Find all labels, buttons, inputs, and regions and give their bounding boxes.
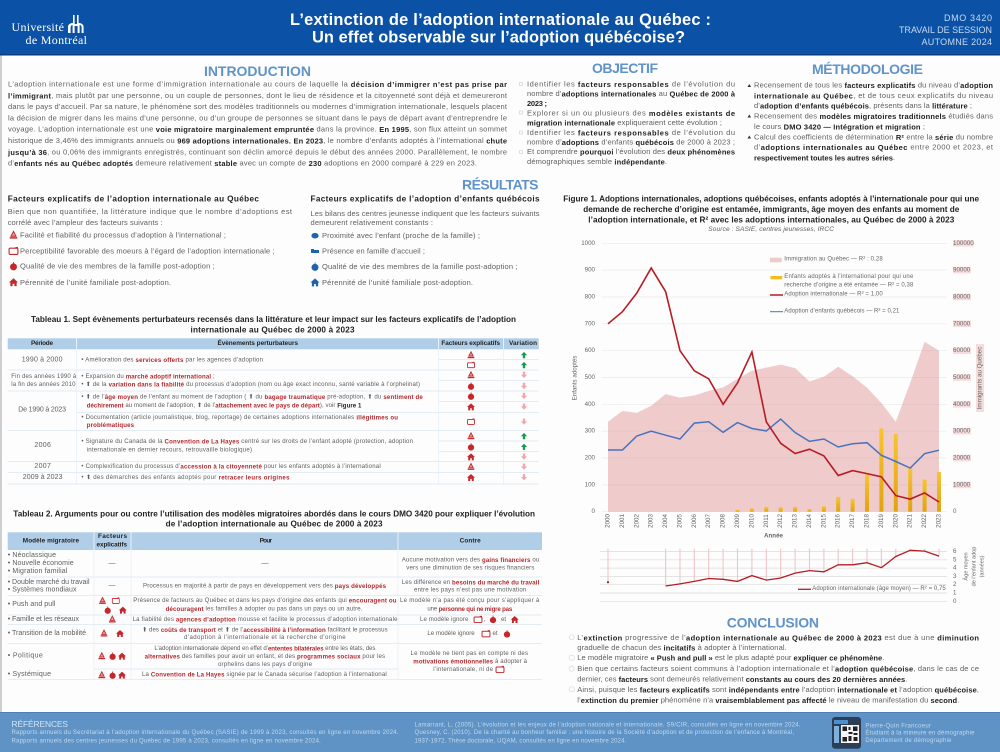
panel: facteurs adoption québécoise: [310, 194, 540, 287]
subheading: facteurs internationaux: Facteurs explicatifs de l’adoption internationale au Québec: [8, 194, 259, 204]
logo: Université de Montréal: Université: [12, 20, 64, 34]
méthodologie bullet list: le cours DMO 3420 — Intégration et migration ;: [754, 122, 925, 131]
x axis years: 2023: [936, 514, 942, 528]
left axis labels: 700: [585, 320, 596, 327]
panel: tableau 1: [8, 315, 539, 484]
panel: méthodologie: [748, 61, 994, 162]
objectif bullet list: Explorer si un ou plusieurs des modèles existants de: [527, 108, 735, 117]
objectif bullet list: nombre d’adoptions internationales au Québec de 2000 à: [527, 89, 736, 98]
age legend: Adoption internationale (âge moyen) — R² = 0,75: [812, 586, 946, 592]
factor list with red icons: Perceptibilité favorable des moeurs à l’égard de l’adoption internationale ;: [20, 246, 275, 256]
line: adoption d'enfants québécois: [608, 419, 939, 468]
tableau 1 période column: 2009 à 2023: [23, 474, 63, 481]
x axis years: 2007: [705, 514, 712, 528]
right axis labels: 70000: [953, 320, 971, 327]
age chart: [600, 547, 985, 605]
conclusion text: dernier, ces facteurs sont demeurés relativement constants au cours des 20 dernières années.: [577, 674, 907, 684]
tableau 2 pour column: [133, 560, 398, 678]
figure 1 title: demande de recherche d’origine est entamée, immigrants, âge moyen des enfants au moment de: [583, 205, 960, 214]
méthodologie bullet list: d’adoptions internationales au Québec entre 2000 et 2023, et: [754, 143, 994, 152]
introduction text: voyage. L’adoption internationale est une voie migratoire marginalement empruntée dans la province. En 1995, son flux atteint un sommet: [8, 125, 508, 134]
tableau 2 pour column: alternatives des familles pour avoir un enfant, et des programmes sociaux pour les: [145, 653, 385, 660]
factor list with blue icons: Pérennité de l’unité familiale post-adoption.: [322, 278, 473, 287]
references right: Quesney, C. (2010). De la charité au bonheur familial : une histoire de la Société d’adoption et de protection de l’enfance à Montréal,: [414, 730, 794, 736]
tableau 2 modèle column: • Push and pull: [8, 601, 56, 608]
introduction text: la décision de migrer dans les mains d’une personne, ou d’un groupe de personnes se situant dans le pays de départ avant d’entreprendre le: [8, 113, 507, 122]
x axis years: 2018: [864, 514, 870, 528]
tableau 2 modèle column: • Nouvelle économie: [8, 560, 74, 567]
objectif bullet list: Et comprendre pourquoi l’évolution des deux phénomènes: [527, 147, 735, 156]
conclusion text: Ainsi, puisque les facteurs explicatifs sont indépendants entre l’adoption internationale et l’adoption québécoise,: [577, 685, 979, 694]
tableau 2 facteurs icons: —: [108, 582, 116, 590]
tableau 2 title: Tableau 2. Arguments pour ou contre l’utilisation des modèles migratoires abordés dans le cours DMO 3420 pour expliquer l’évolution: [13, 510, 535, 518]
objectif bullet list: démographiques semble indépendante.: [527, 157, 667, 166]
tableau 1 header row: Facteurs explicatifs: [441, 340, 500, 347]
méthodologie bullet list: d’adoption d’enfants québécois, présents dans la littérature ;: [754, 101, 972, 110]
x axis years: 2009: [734, 514, 741, 528]
tableau 2 contre column: motivations émotionnelles à adopter à: [413, 658, 528, 665]
tableau 1 header row: Variation: [509, 340, 537, 347]
author: Département de démographie: [865, 738, 952, 744]
factor list with red icons: Facilité et fiabilité du processus d’adoption à l’international ;: [20, 230, 226, 240]
x axis years: 2014: [806, 514, 813, 528]
age axis title: [963, 547, 985, 586]
conclusion rings: [569, 635, 574, 692]
conclusion text: Bien que certains facteurs soient communs à l’adoption internationale et l’adoption québécoise, dans le cas de ce: [577, 664, 979, 673]
tableau 1 période column: 1990 à 2000: [22, 356, 63, 364]
age axis labels: 0: [953, 598, 957, 605]
objectif bullet list: Identifier les facteurs responsables de l’évolution du: [527, 128, 735, 137]
tableau 1 header row: Évènements perturbateurs: [218, 338, 298, 347]
left axis labels: [581, 240, 596, 515]
conclusion text: l’extinction du premier phénomène n’a vraisemblablement pas affecté le niveau de manifestation du second.: [577, 696, 959, 704]
méthodologie bullet list: internationale au Québec, et de tous ceux explicatifs du niveau: [754, 91, 993, 100]
logo: Université de Montréal: [12, 15, 88, 47]
course info: TRAVAIL DE SESSION: [899, 25, 992, 35]
intro text: facteurs québécois: Les bilans des centres jeunesse indiquent que les facteurs suivants: [310, 209, 540, 218]
panel: conclusion: [569, 614, 979, 704]
intro text: facteurs internationaux: [8, 207, 293, 227]
age axis title: de l’enfant adop: [971, 547, 977, 586]
age axis labels: 5: [953, 556, 957, 563]
tableau 1 title: [31, 315, 516, 334]
tableau 2 modèle column: • Systémique: [8, 671, 51, 678]
tableau 1 période column: 2006: [34, 442, 51, 449]
x axis years: 2000: [604, 514, 612, 528]
tableau 2 title: [13, 510, 535, 528]
conclusion text: graduelle de chacun des incitatifs à adopter à l’international.: [577, 643, 787, 652]
tableau 2 contre column: l’internationale, ni de: [433, 666, 494, 673]
tableau 2 contre column: vers une diminution de ses risques financiers: [406, 564, 534, 572]
figure 1 title: l’adoption internationale, et R² avec les adoptions internationales, au Québec de 2000 à 2023: [588, 216, 955, 224]
heading: objectif: OBJECTIF: [592, 60, 658, 76]
age axis labels: 2: [953, 581, 957, 588]
tableau 2 header row: Pour: [260, 538, 272, 544]
left axis labels: 200: [585, 454, 596, 462]
figure 1 title: Source : SASIE, centres jeunesses, IRCC: [708, 226, 834, 233]
figure 1 title: Figure 1. Adoptions internationales, adoptions québécoises, enfants adoptés à l’internationale pour qui une: [563, 194, 979, 204]
tableau 2 title: de l’adoption internationale au Québec de 2000 à 2023: [166, 520, 383, 528]
left axis labels: 0: [592, 508, 596, 515]
legend: Enfants adoptés à l’international pour qui une: [784, 274, 914, 280]
tableau 2 modèle column: • Double marché du travail: [8, 579, 90, 586]
legend: Adoption d’enfants québécois — R² = 0,21: [784, 309, 900, 315]
heading: méthodologie: MÉTHODOLOGIE: [812, 61, 923, 77]
méthodologie bullet list: Recensement des modèles migratoires traditionnels étudiés dans: [754, 112, 993, 120]
right axis labels: 50000: [953, 374, 971, 381]
left axis labels: 100: [585, 481, 596, 488]
factor list with blue icons: Proximité avec l’enfant (proche de la famille) ;: [322, 231, 480, 240]
x axis years: 2022: [921, 514, 928, 528]
x axis years: 2016: [835, 514, 842, 528]
tableau 1 title: internationale au Québec de 2000 à 2023: [190, 326, 355, 334]
introduction text: l’immigrant, mais plutôt par une personne, ou un couple de personnes, dont le lieu de résidence et la citoyenneté sont déjà et demeureront: [8, 91, 508, 100]
tableau 2 header row: [8, 532, 542, 550]
age axis labels: 3: [953, 573, 957, 580]
tableau 2 header row: Modèle migratoire: [23, 538, 79, 544]
drop lines: [608, 549, 939, 586]
tableau 2 contre column: Le modèle ne tient pas en compte ni des: [410, 650, 528, 657]
logo: Université de Montréal: de Montréal: [26, 33, 88, 47]
x axis years: 2002: [633, 514, 640, 528]
right axis labels: [953, 240, 974, 515]
x axis years: [604, 514, 942, 528]
references right: 1937-1972. Thèse doctorale, UQAM, consultés en ligne en novembre 2024.: [414, 739, 627, 745]
tableau 1 évènements column: • Signature du Canada de la Convention de La Hayes centré sur les droits de l’enfant adopté (protection, adoption: [81, 438, 413, 445]
tableau 2 contre column: et: [501, 616, 506, 623]
left axis labels: 300: [585, 428, 596, 435]
tableau 1 facteurs icons: [467, 352, 475, 481]
tableau 2 header row: Contre: [460, 538, 481, 544]
tableau 1 évènements column: • ⬆ de l’âge moyen de l’enfant au moment de l’adoption ( ⬆ du bagage traumatique pré-adoption, ⬆ du sentiment de: [81, 394, 423, 400]
tableau 1 header row: Période: [31, 340, 53, 347]
tableau 2 contre column: Aucune motivation vers des gains financiers ou: [402, 556, 539, 564]
tableau 1 évènements column: déchirement au moment de l’adoption, ⬆ de l’attachement avec le pays de départ), voir Figure 1: [87, 402, 362, 409]
tableau 2 pour column: d’adoption à l’internationale et la recherche d’origine: [184, 634, 346, 641]
x axis years: 2005: [676, 514, 684, 528]
conclusion text: L’extinction progressive de l’adoption internationale au Québec de 2000 à 2023 est due à une diminution: [577, 633, 979, 642]
tableau 2 facteurs icons: —: [108, 560, 116, 568]
tableau 2 pour column: découragent les familles à adopter ou pas dans un pays ou un autre.: [166, 606, 363, 612]
tableau 1 période column: [11, 356, 77, 481]
right axis labels: 90000: [953, 267, 971, 274]
tableau 1 période column: Fin des années 1990 à: [11, 373, 77, 380]
introduction text: L’adoption internationale est une forme d’immigration internationale au cours de laquelle la décision d’immigrer n’est pas prise par: [8, 80, 507, 88]
heading: résultats: RÉSULTATS: [462, 176, 538, 192]
area: immigration: [608, 342, 939, 512]
tableau 1 évènements column: • ⬆ des démarches des enfants adoptés pour retracer leurs origines: [81, 474, 290, 481]
left axis labels: 500: [585, 374, 596, 381]
tableau 2 header row: Facteurs: [98, 533, 127, 540]
heading: conclusion: CONCLUSION: [727, 614, 819, 630]
tableau 2 pour column: Présence de facteurs au Québec et dans les pays d’origine des enfants qui encouragent ou: [133, 597, 397, 604]
tableau 2 modèle column: • Transition de la mobilité: [8, 630, 86, 637]
right axis labels: 30000: [953, 428, 971, 435]
right axis labels: 40000: [953, 401, 971, 408]
heading: introduction: INTRODUCTION: [204, 63, 311, 79]
age axis title: Âge moyen: [963, 552, 970, 581]
conclusion text: Le modèle migratoire « Push and pull » est le plus adapté pour expliquer ce phénomène.: [577, 653, 884, 662]
tableau 2 pour column: —: [262, 560, 268, 568]
tableau 1 évènements column: • Complexification du processus d’accession à la citoyenneté pour les enfants adoptés à l’international: [81, 463, 381, 470]
age axis labels: 6: [953, 548, 957, 555]
left axis labels: 800: [585, 294, 596, 300]
footer: [0, 712, 1000, 752]
right axis labels: 100000: [953, 240, 974, 247]
left axis labels: 1000: [581, 240, 596, 247]
tableau 2 pour column: ⬆ des coûts de transport et ⬆ de l’accessibilité à l’information facilitant le processus: [142, 626, 388, 634]
tableau 1 évènements column: [81, 356, 423, 481]
factor list with red icons: Qualité de vie des membres de la famille post-adoption ;: [20, 262, 215, 270]
tableau 1 évènements column: • Documentation (article journalistique, blog, reportage) de certaines adoptions internationales illégitimes ou: [81, 414, 398, 421]
tableau 2 contre column: et: [492, 630, 498, 637]
tableau 2 pour column: L’adoption internationale dépend en effet d’ententes bilatérales entre les états, des: [154, 645, 375, 652]
tableau 2 pour column: Processus en majorité à partir de pays en développement vers des pays développés: [143, 582, 387, 590]
tableau 2 contre column: Les différence en besoins du marché du travail: [402, 579, 540, 586]
bars: recherche d'origine: [736, 428, 941, 512]
objectif bullet list: migration internationale expliqueraient cette évolution ;: [527, 118, 722, 127]
age axis labels: [953, 548, 957, 605]
objectif bullet list: Identifier les facteurs responsables de l’évolution du: [527, 80, 735, 88]
icon: phone with QR code: [832, 717, 861, 749]
x axis years: 2019: [878, 514, 885, 528]
panel: objectif: [520, 60, 736, 166]
age axis labels: 1: [953, 590, 957, 596]
line: adoption internationale: [608, 268, 939, 502]
references heading: RÉFÉRENCES: [12, 719, 68, 729]
tableau 2 contre column: entre les pays n’est pas une motivation: [414, 586, 526, 594]
x axis years: 2013: [792, 514, 799, 528]
factor list with blue icons: [310, 231, 518, 287]
tableau 2 contre column: [400, 556, 540, 673]
tableau 2 contre column: Le modèle ignore: [427, 630, 475, 637]
references left: [12, 730, 399, 745]
tableau 2 facteurs icons: [98, 560, 127, 679]
legend: Adoption internationale — R² = 1,00: [784, 291, 883, 297]
x axis years: 2017: [849, 514, 856, 528]
legend: Immigration au Québec — R² : 0,28: [784, 257, 883, 263]
panel: tableau 2: [8, 510, 542, 679]
méthodologie bullet list: Recensement de tous les facteurs explicatifs du niveau d’adoption: [754, 80, 993, 90]
introduction text: historique de 3,46% des immigrants annuels ou 969 adoptions internationales. En 2023, le nombre d’enfants adoptés à l’international chute: [8, 136, 507, 145]
tableau 2 modèle column: • Systèmes mondiaux: [8, 586, 77, 594]
legend: recherche d’origine a été entamée — R² = 0,38: [784, 283, 914, 289]
legend: [770, 257, 914, 315]
age axis title: (années): [979, 555, 985, 578]
tableau 2 pour column: La Convention de La Hayes signée par le Canada sécurise l’adoption à l’international: [142, 671, 387, 678]
intro text: facteurs internationaux: Bien que non quantifiée, la littérature indique que le nombre d’adoptions est: [8, 207, 293, 216]
tableau 1 période column: De 1990 à 2023: [18, 406, 66, 414]
x axis years: 2001: [619, 514, 626, 528]
x axis years: 2020: [892, 514, 899, 528]
conclusion text: [577, 633, 979, 704]
right axis labels: 20000: [953, 454, 971, 462]
objectif bullet list: [520, 80, 736, 166]
x axis years: 2012: [777, 514, 784, 528]
panel: introduction: [7, 63, 508, 168]
x axis title: Année: [764, 532, 784, 540]
introduction text: d’enfants nés au Québec adoptés demeure relativement stable avec un compte de 230 adoptions en 2000 comparé à 229 en 2023.: [8, 159, 477, 168]
main line and area chart: [572, 240, 984, 540]
tableau 2 modèle column: [8, 552, 90, 678]
tableau 2 modèle column: • Politique: [8, 652, 43, 660]
right axis labels: 0: [953, 508, 957, 515]
x axis years: 2011: [763, 514, 770, 528]
point 2000: [607, 581, 609, 583]
x axis years: 2010: [748, 514, 755, 528]
factor list with red icons: [9, 230, 275, 287]
tableau 2 contre column: Le modèle n’a pas été conçu pour s’appliquer à: [400, 597, 540, 604]
right axis labels: 10000: [953, 481, 971, 488]
references left: Rapports annuels des centres jeunesses du Québec de 1995 à 2023, consultés en ligne en novembre 2024.: [12, 739, 321, 745]
author: Pierre-Quin Francoeur: [865, 723, 931, 729]
introduction text: dans le pays d’accueil. Par sa nature, le phénomène sort des modèles traditionnels ou modernes d’immigration internationale, lesquels placent: [8, 102, 508, 111]
tableau 2 pour column: La fiabilité des agences d’adoption mousse et facilite le processus d’adoption internationale: [133, 616, 398, 623]
tableau 1 évènements column: • ⬆ de la variation dans la fiabilité du processus d’adoption (nom ou âge exact inconnu, santé variable à l’orphelinat): [81, 381, 420, 388]
intro text: facteurs québécois: demeurent relativement constants :: [310, 218, 433, 227]
tableau 2 contre column: ,: [484, 616, 486, 623]
title: [290, 11, 711, 46]
tableau 2 modèle column: • Migration familial: [8, 568, 68, 575]
factor list with blue icons: Qualité de vie des membres de la famille post-adoption ;: [322, 262, 518, 271]
factor list with blue icons: Présence en famille d’accueil ;: [322, 246, 425, 256]
course info: DMO 3420: [944, 13, 992, 23]
references right: Lamarrant, L. (2005). L’évolution et les enjeux de l’adoption nationale et internationale. S9/CIR, consultés en ligne en novembre 2024.: [414, 722, 801, 728]
tableau 1 évènements column: internationale en dernier recours, retrouvaille biologique): [87, 446, 252, 454]
left axis labels: 400: [585, 401, 596, 408]
tableau 1 évènements column: problématiques: [87, 422, 135, 429]
x axis years: 2015: [820, 514, 827, 528]
factor list with red icons: Pérennité de l’unité familiale post-adoption.: [20, 278, 171, 287]
tableau 1 évènements column: • Amélioration des services offerts par les agences d’adoption: [81, 356, 263, 364]
panel: facteurs adoption internationale: [8, 194, 293, 287]
intro text: facteurs internationaux: corrélé avec l’ampleur des facteurs suivants :: [8, 218, 163, 227]
x axis years: 2008: [720, 514, 727, 528]
author: [865, 723, 975, 744]
title: L’extinction de l’adoption internationale au Québec :: [290, 11, 711, 29]
subheading: facteurs québécois: Facteurs explicatifs de l’adoption d’enfants québécois: [310, 194, 540, 204]
line: âge moyen: [666, 550, 939, 586]
introduction text: [7, 80, 508, 168]
tableau 1 évènements column: • Expansion du marché adoptif international ;: [81, 373, 215, 380]
references right: [414, 722, 801, 745]
figure 1 title: [563, 194, 979, 233]
right axis labels: 60000: [953, 347, 971, 354]
introduction text: jusqu’à 36, ou 0,06% des immigrants enregistrés, continuant son déclin amorcé depuis le début des années 2000. Parallèlement, le nombre: [7, 147, 507, 156]
x axis years: 2004: [662, 514, 669, 528]
tableau 2 pour column: orphelins dans les pays d’origine: [218, 661, 313, 668]
objectif bullet list: 2023 ;: [527, 99, 547, 108]
tableau 1 title: Tableau 1. Sept évènements perturbateurs recensés dans la littérature et leur impact sur les facteurs explicatifs de l’adoption: [31, 315, 516, 324]
tableau 1 période column: la fin des années 2010: [11, 381, 76, 388]
course info: AUTOMNE 2024: [922, 37, 992, 47]
méthodologie bullet list: respectivement toutes les autres séries.: [754, 153, 895, 162]
méthodologie bullet list: Calcul des coefficients de détermination R² entre la série du nombre: [754, 132, 993, 141]
author: Étudiant à la mineure en démographie: [865, 730, 975, 737]
tableau 2 modèle column: • Néoclassique: [8, 552, 56, 559]
title: Un effet observable sur l’adoption québécoise?: [312, 28, 685, 46]
right axis labels: 80000: [953, 294, 971, 300]
x axis years: 2006: [691, 514, 698, 528]
tableau 2 contre column: Le modèle ignore: [420, 616, 469, 623]
panel: figure 1: [563, 194, 985, 605]
left axis title: Enfants adoptés: [572, 356, 578, 400]
tableau 2 header row: explicatifs: [96, 542, 127, 548]
tableau 2 modèle column: • Famille et les réseaux: [8, 616, 80, 623]
references left: Rapports annuels du Secrétariat à l’adoption internationale du Québec (SASIE) de 1999 à 2023, consultés en ligne en novembre 2024.: [12, 730, 399, 736]
left axis labels: 900: [585, 267, 596, 274]
course info: [899, 13, 992, 47]
x axis years: 2003: [648, 514, 655, 528]
age axis labels: 4: [953, 565, 957, 572]
left axis labels: 600: [585, 347, 596, 354]
tableau 1 variation arrows: [521, 352, 527, 480]
right axis title: Immigrants au Québec: [976, 347, 984, 409]
tableau 1 période column: 2007: [34, 463, 51, 470]
méthodologie bullet list: [748, 80, 994, 162]
intro text: facteurs québécois: [310, 209, 540, 227]
objectif bullet list: nombre d’adoptions d’enfants québécois de 2000 à 2023 ;: [527, 138, 735, 146]
x axis years: 2021: [907, 514, 914, 528]
tableau 1 header row: [8, 338, 539, 349]
tableau 2 contre column: une personne qui ne migre pas: [427, 606, 513, 612]
header banner: [0, 0, 1000, 56]
